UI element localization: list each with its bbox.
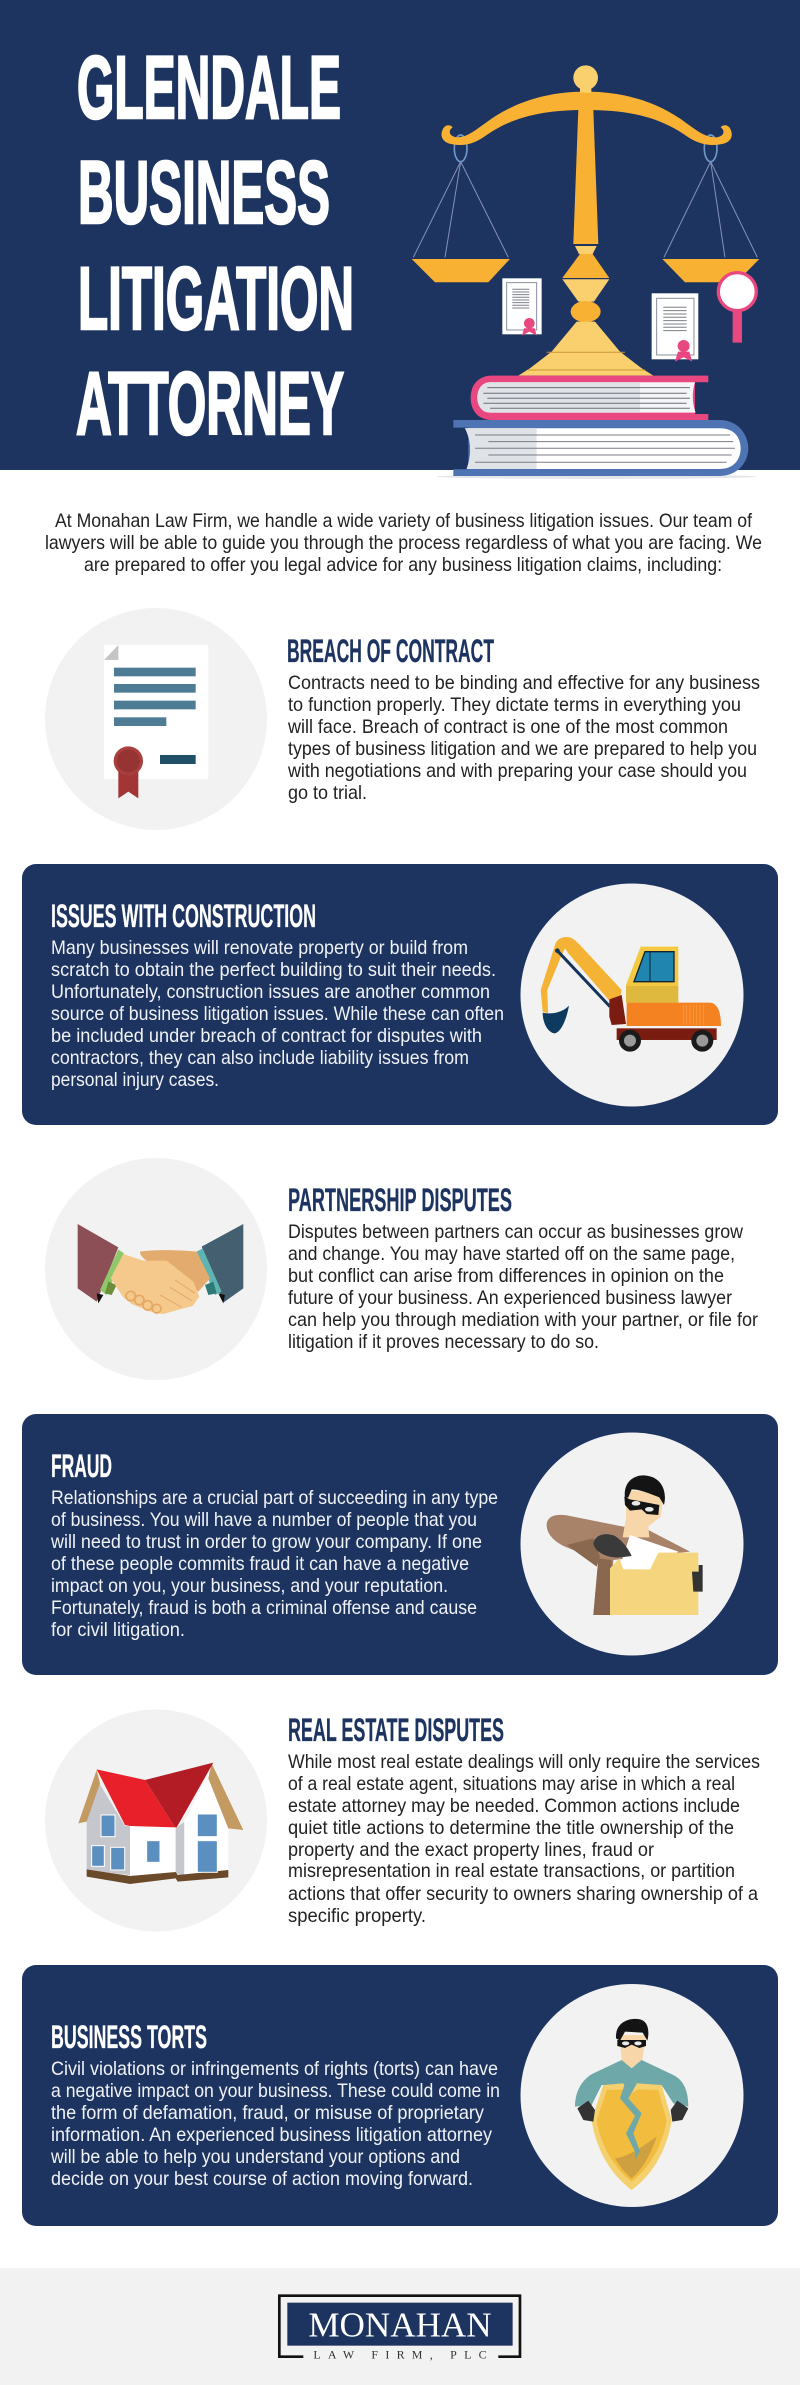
heading: BUSINESS TORTS <box>51 2019 207 2055</box>
heading: BREACH OF CONTRACT <box>287 633 494 669</box>
body text <box>50 1487 498 1641</box>
header banner <box>0 0 800 479</box>
panel: business torts <box>22 1965 778 2226</box>
body text: a negative impact on your business. These could come in <box>51 2080 500 2102</box>
body text: impact on you, your business, and your reputation. <box>51 1575 448 1597</box>
scale beam <box>442 92 732 145</box>
heading: FRAUD <box>51 1448 112 1484</box>
left certificate <box>502 278 542 336</box>
magnifying glass <box>718 273 756 343</box>
logo: Monahan Law Firm, PLC: MONAHAN <box>308 2306 492 2345</box>
body text: contractors, they can also include liability issues from <box>51 1047 469 1069</box>
body text: Civil violations or infringements of rights (torts) can have <box>51 2058 498 2080</box>
body text: can help you through mediation with your partner, or file for <box>288 1309 758 1331</box>
body text <box>287 672 760 804</box>
body text: scratch to obtain the perfect building to suit their needs. <box>51 959 496 981</box>
body text <box>288 1751 760 1927</box>
right certificate <box>652 293 698 362</box>
body text: will face. Breach of contract is one of the most common <box>287 716 728 738</box>
body text: be included under breach of contract for disputes with <box>51 1025 482 1047</box>
body text <box>51 937 504 1091</box>
heading: REAL ESTATE DISPUTES <box>288 1712 504 1748</box>
section: breach of contract <box>45 608 760 830</box>
body text: While most real estate dealings will only require the services <box>288 1751 760 1773</box>
heading: ISSUES WITH CONSTRUCTION <box>51 898 316 934</box>
intro paragraph <box>45 510 762 576</box>
body text: estate attorney may be needed. Common actions include <box>288 1795 740 1817</box>
body text <box>50 2058 500 2190</box>
body text: litigation if it proves necessary to do so. <box>288 1331 599 1353</box>
body text: with negotiations and with preparing your case should you <box>287 760 747 782</box>
body text: Many businesses will renovate property or build from <box>51 937 468 959</box>
body text: decide on your best course of action moving forward. <box>51 2168 473 2190</box>
body text: Disputes between partners can occur as businesses grow <box>288 1221 744 1243</box>
logo: Monahan Law Firm, PLC <box>279 2296 520 2362</box>
icon: thief breaking shield <box>520 1984 744 2207</box>
panel: fraud <box>22 1414 778 1675</box>
body text: go to trial. <box>288 782 367 804</box>
body text: but conflict can arise from differences in opinion on the <box>288 1265 724 1287</box>
body text: of these people commits fraud it can have a negative <box>51 1553 469 1575</box>
body text: Unfortunately, construction issues are another common <box>51 981 490 1003</box>
footer band <box>0 2268 800 2385</box>
body text: Relationships are a crucial part of succeeding in any type <box>51 1487 498 1509</box>
icon: masked thief with folder <box>520 1432 744 1656</box>
body text: misrepresentation in real estate transactions, or partition <box>288 1860 735 1882</box>
body text: will be able to help you understand your options and <box>50 2146 460 2168</box>
body text: source of business litigation issues. While these can often <box>51 1003 504 1025</box>
icon: house <box>45 1710 267 1932</box>
logo: Monahan Law Firm, PLC: LAW FIRM, PLC <box>313 2348 487 2362</box>
heading: PARTNERSHIP DISPUTES <box>288 1182 512 1218</box>
body text: of business. You will have a number of people that you <box>51 1509 477 1531</box>
body text: and change. You may have started off on the same page, <box>288 1243 735 1265</box>
title: GLENDALE <box>77 37 341 137</box>
body text: for civil litigation. <box>51 1619 185 1641</box>
scale pans <box>412 259 759 282</box>
blue book <box>453 420 748 476</box>
body text: quiet title actions to determine the title ownership of the <box>288 1817 734 1839</box>
body text: actions that offer security to owners sharing ownership of a <box>288 1883 758 1905</box>
intro paragraph: are prepared to offer you legal advice for any business litigation claims, including: <box>84 554 722 576</box>
title: BUSINESS <box>78 142 330 242</box>
title: ATTORNEY <box>76 353 344 453</box>
section: partnership disputes <box>45 1158 758 1380</box>
body text: to function properly. They dictate terms in everything you <box>288 694 741 716</box>
body text: the form of defamation, fraud, or misuse of proprietary <box>51 2102 484 2124</box>
icon: contract document <box>45 608 267 830</box>
body text: types of business litigation and we are prepared to help you <box>288 738 757 760</box>
title <box>76 37 354 453</box>
body text: property and the exact property lines, fraud or <box>288 1839 654 1861</box>
body text <box>288 1221 758 1353</box>
title: LITIGATION <box>78 248 354 348</box>
icon: excavator <box>520 884 744 1106</box>
body text: will need to trust in order to grow your company. If one <box>50 1531 482 1553</box>
pink book <box>471 376 708 420</box>
icon: scales of justice on books <box>412 65 759 479</box>
body text: Contracts need to be binding and effective for any business <box>288 672 760 694</box>
section: real estate disputes <box>45 1710 760 1932</box>
body text: specific property. <box>288 1905 426 1927</box>
body text: personal injury cases. <box>51 1069 219 1091</box>
icon: handshake <box>45 1158 267 1380</box>
body text: future of your business. An experienced business lawyer <box>288 1287 732 1309</box>
body text: information. An experienced business litigation attorney <box>51 2124 492 2146</box>
scale column and base <box>518 65 653 376</box>
body text: of a real estate agent, situations may arise in which a real <box>288 1773 735 1795</box>
scale strings <box>413 135 757 257</box>
panel: issues with construction <box>22 864 778 1125</box>
body text: Fortunately, fraud is both a criminal offense and cause <box>51 1597 477 1619</box>
